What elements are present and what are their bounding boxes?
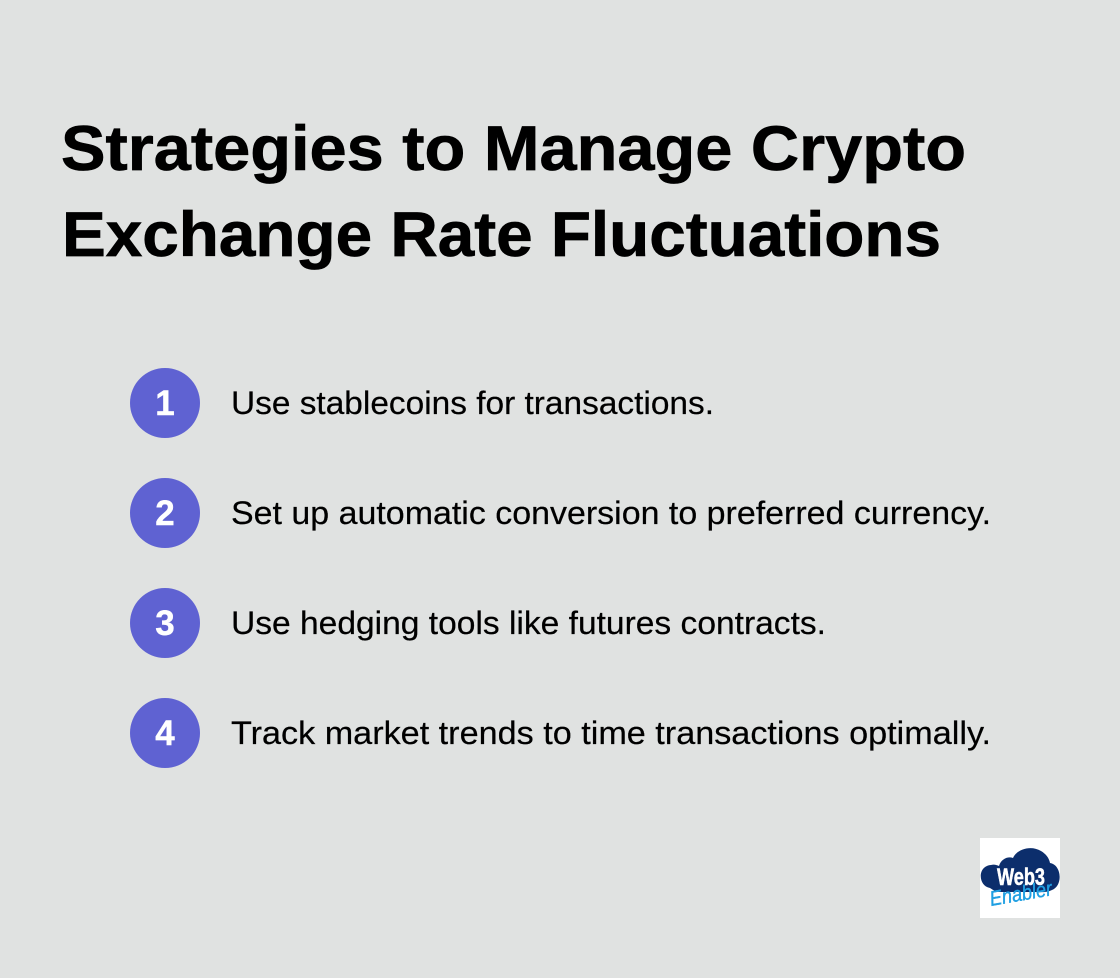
logo: Web3 Enabler — [980, 838, 1060, 918]
strategy list — [130, 368, 991, 768]
step 1: use stablecoins: 1 — [155, 384, 175, 423]
step 3: hedging tools: 3 — [155, 604, 175, 643]
step 3: hedging tools: Use hedging tools like futures contracts. — [231, 605, 826, 641]
title — [61, 114, 966, 270]
step 4: track market trends: Track market trends to time transactions optimally. — [231, 715, 991, 751]
step 1: use stablecoins — [130, 368, 714, 438]
logo: Web3 Enabler: Web3 — [997, 864, 1045, 891]
step 4: track market trends: 4 — [155, 714, 175, 753]
step 2: automatic conversion — [130, 478, 991, 548]
step 2: automatic conversion: Set up automatic conversion to preferred currency. — [231, 495, 991, 531]
step 3: hedging tools — [130, 588, 826, 658]
title: Exchange Rate Fluctuations — [62, 200, 941, 270]
logo: Web3 Enabler: Enabler — [988, 877, 1055, 911]
title: Strategies to Manage Crypto — [61, 114, 966, 184]
step 4: track market trends — [130, 698, 991, 768]
step 1: use stablecoins: Use stablecoins for transactions. — [231, 385, 714, 421]
step 2: automatic conversion: 2 — [155, 494, 175, 533]
